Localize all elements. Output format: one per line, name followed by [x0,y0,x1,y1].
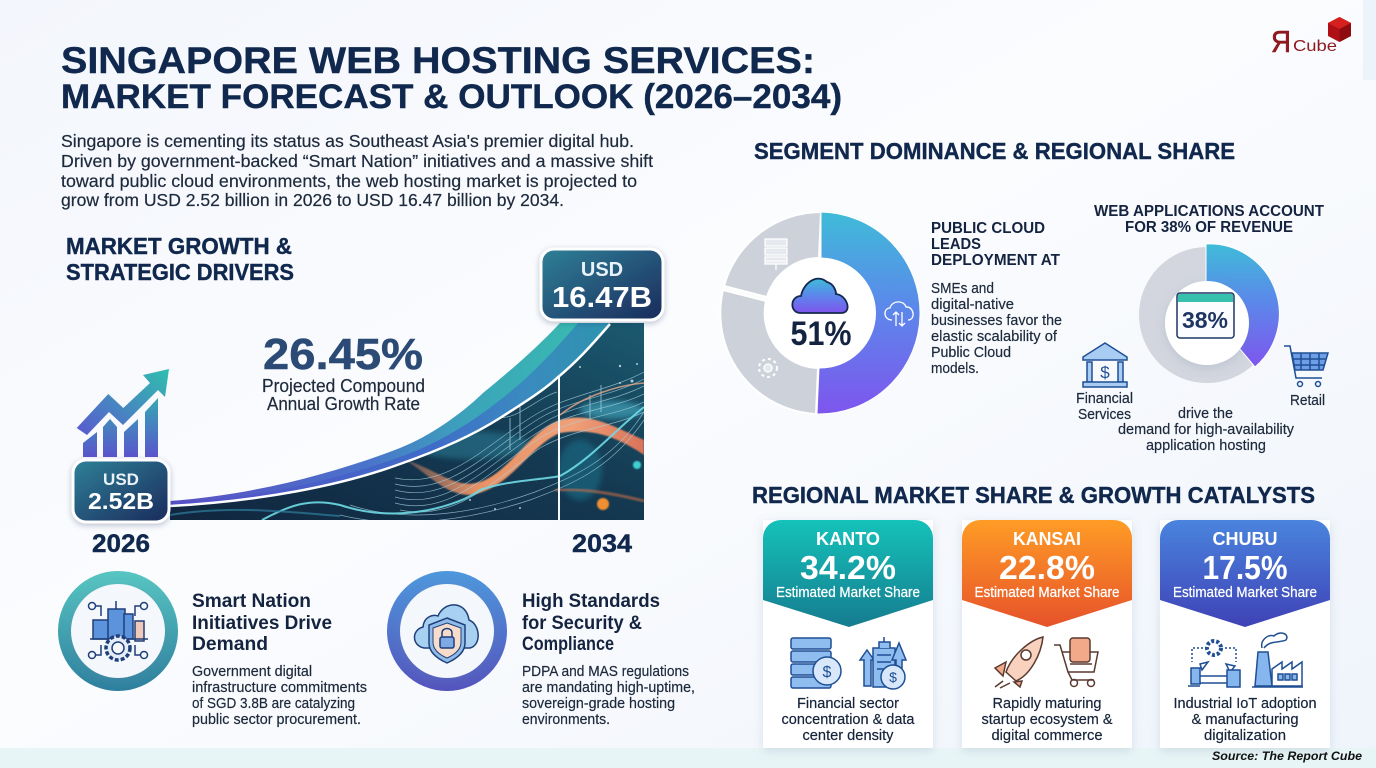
text: security and compliance: Compliance [522,634,614,655]
heading: web applications: FOR 38% OF REVENUE [1125,219,1293,236]
text: public cloud leads: PUBLIC CLOUD [931,220,1045,237]
text: public cloud leads: SMEs and [931,280,994,297]
donut chart: web applications 38% [1139,244,1279,383]
heading: market growth and strategic drivers: STRATEGIC DRIVERS [66,259,294,285]
text: public cloud leads [931,220,1062,377]
panel: Kansai: digital commerce [992,727,1102,744]
badge: USD 16.47B: 16.47B [552,282,652,314]
text: public cloud leads: Public Cloud [931,344,1011,361]
text: smart nation: public sector procurement. [192,711,361,728]
callout: CAGR: Projected Compound [262,376,425,396]
heading: market growth and strategic drivers [66,233,294,285]
logo: RCube: R [1271,24,1291,59]
text: security and compliance: are mandating high-uptime, [522,679,695,696]
text: sector labels and note: demand for high-availability [1118,421,1294,438]
panel: Kanto: 34.2% [800,549,896,586]
panel: Kanto: Financial sector [797,695,899,712]
donut chart: web applications 38%: 38% [1182,307,1228,333]
donut chart: public cloud 51% [720,212,920,414]
text: public cloud leads: DEPLOYMENT AT [931,252,1060,269]
heading: web applications [1094,203,1325,236]
text: smart nation: Demand [192,634,268,655]
source note: Source: The Report Cube [1212,749,1362,763]
text: public cloud leads: businesses favor the [931,312,1062,329]
heading: web applications: WEB APPLICATIONS ACCOUNT [1094,203,1325,220]
text: security and compliance: PDPA and MAS regulations [522,663,689,680]
panel: Chubu: Estimated Market Share [1173,584,1317,601]
panel: Kansai: startup ecosystem & [982,711,1112,728]
text: smart nation [192,591,367,728]
panel: Kansai: KANSAI [1013,529,1081,549]
text: sector labels and note: drive the [1178,405,1233,422]
panel: Kanto: center density [802,727,894,744]
growth chart: abstract data backdrop and curve [170,320,644,522]
text: smart nation: Smart Nation [192,591,311,612]
panel: Kanto [763,520,933,748]
donut chart: public cloud 51%: 51% [790,315,852,353]
intro paragraph: Singapore is cementing its status as Southeast Asia's premier digital hub. [61,131,634,151]
panel: Kansai: Rapidly maturing [992,695,1102,712]
top right strip [1363,0,1376,80]
text: public cloud leads: models. [931,360,979,377]
panel: Chubu: CHUBU [1212,529,1278,549]
text: sector labels and note: Financial [1076,390,1133,407]
panel: Chubu: Industrial IoT adoption [1174,695,1316,712]
panel: Kanto: $ [889,669,897,685]
axis labels: years: 2026 [92,530,150,558]
text: sector labels and note: application hosting [1146,437,1266,454]
text: security and compliance: High Standards [522,591,660,612]
logo: RCube [1271,17,1351,59]
panel: Kanto: $ [823,664,832,681]
title [61,40,842,116]
intro paragraph [61,131,653,210]
axis labels: years [92,530,632,558]
panel: Chubu: 17.5% [1202,549,1288,586]
heading: regional market share: REGIONAL MARKET SHARE & GROWTH CATALYSTS [752,482,1315,508]
badge: USD 2.52B [73,460,169,522]
text: smart nation: of SGD 3.8B are catalyzing [192,695,355,712]
intro paragraph: grow from USD 2.52 billion in 2026 to USD 16.47 billion by 2034. [61,190,564,210]
panel: Kansai [962,520,1132,748]
text: security and compliance: sovereign-grade hosting [522,695,675,712]
panel: Kansai: Estimated Market Share [974,584,1120,601]
logo: RCube: Cube [1293,38,1337,55]
text: public cloud leads: LEADS [931,236,981,253]
icon: bank [1083,343,1127,387]
badge: USD 2.52B: 2.52B [88,488,154,514]
icon: shopping cart [1284,346,1328,386]
title: SINGAPORE WEB HOSTING SERVICES: [61,40,815,81]
text: sector labels and note: Retail [1290,392,1325,409]
bottom source band [0,748,1376,768]
icon: rising bar chart with arrow [77,369,169,457]
panel: Kanto: concentration & data [782,711,915,728]
text: smart nation: Government digital [192,663,312,680]
panel: Kanto: KANTO [816,529,880,549]
text: public cloud leads: digital-native [931,296,1014,313]
intro paragraph: Driven by government-backed “Smart Nation” initiatives and a massive shift [61,151,653,171]
icon: cloud security shield [387,571,507,691]
callout: CAGR [262,330,425,414]
text: security and compliance: for Security & [522,613,642,634]
panel: Chubu [1160,520,1330,748]
text: sector labels and note [1076,390,1325,454]
axis labels: years: 2034 [572,530,632,558]
heading: market growth and strategic drivers: MARKET GROWTH & [66,233,292,259]
heading: segment dominance: SEGMENT DOMINANCE & REGIONAL SHARE [754,138,1235,164]
text: smart nation: Initiatives Drive [192,613,332,634]
panel: Kansai: 22.8% [999,549,1095,586]
badge: USD 16.47B [541,249,663,320]
title: MARKET FORECAST & OUTLOOK (2026–2034) [61,78,842,116]
icon: smart nation city and gear [58,571,178,691]
panel: Chubu: digitalization [1204,727,1286,744]
text: smart nation: infrastructure commitments [192,679,367,696]
panel: Kanto: Estimated Market Share [776,584,920,601]
text: public cloud leads: elastic scalability of [931,328,1058,345]
badge: USD 16.47B: USD [581,259,623,281]
icon: bank: $ [1100,363,1110,382]
badge: USD 2.52B: USD [103,470,139,489]
panel: Chubu: & manufacturing [1192,711,1298,728]
intro paragraph: toward public cloud environments, the web hosting market is projected to [61,171,637,191]
text: sector labels and note: Services [1078,406,1131,423]
callout: CAGR: Annual Growth Rate [267,394,420,414]
callout: CAGR: 26.45% [263,330,423,379]
text: security and compliance [522,591,695,728]
text: security and compliance: environments. [522,711,610,728]
